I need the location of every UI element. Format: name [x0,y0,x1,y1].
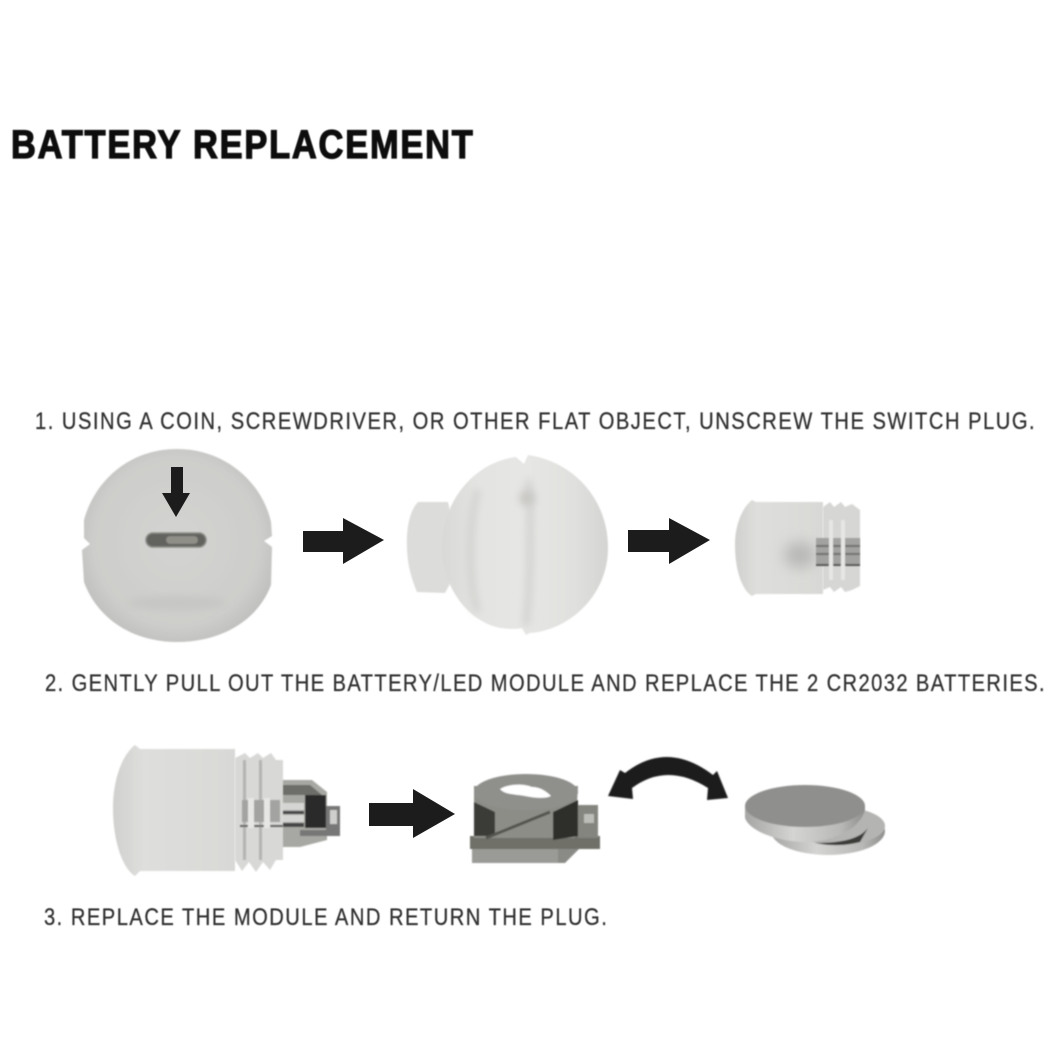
threaded neck [235,753,283,872]
photo: ball side view [407,455,608,635]
photo: plug with module [113,745,340,876]
back coin [771,807,885,855]
icon: screwdriver slot [146,533,206,547]
photo: unscrewed plug [735,500,860,596]
icon: down arrow [162,467,190,517]
step 2 instruction: 2. GENTLY PULL OUT THE BATTERY/LED MODULE AND REPLACE THE 2 CR2032 BATTERIES. [45,669,1045,696]
photo: ball front with slot [82,449,272,642]
title: BATTERY REPLACEMENT [11,122,473,167]
photo: battery module [470,774,600,863]
front coin [745,806,865,842]
arrow: curved double-headed swap [608,757,728,800]
screw thread [816,520,860,580]
arrow: ball front to ball side [303,518,384,564]
plug body [113,745,235,876]
step 3 instruction: 3. REPLACE THE MODULE AND RETURN THE PLUG. [44,903,607,930]
module behind plug [278,780,340,847]
step 1 instruction: 1. USING A COIN, SCREWDRIVER, OR OTHER FLAT OBJECT, UNSCREW THE SWITCH PLUG. [35,407,1035,434]
arrow: plug to module [369,789,455,838]
photo: CR2032 coin batteries [745,785,885,855]
arrow: ball side to plug [628,518,710,564]
